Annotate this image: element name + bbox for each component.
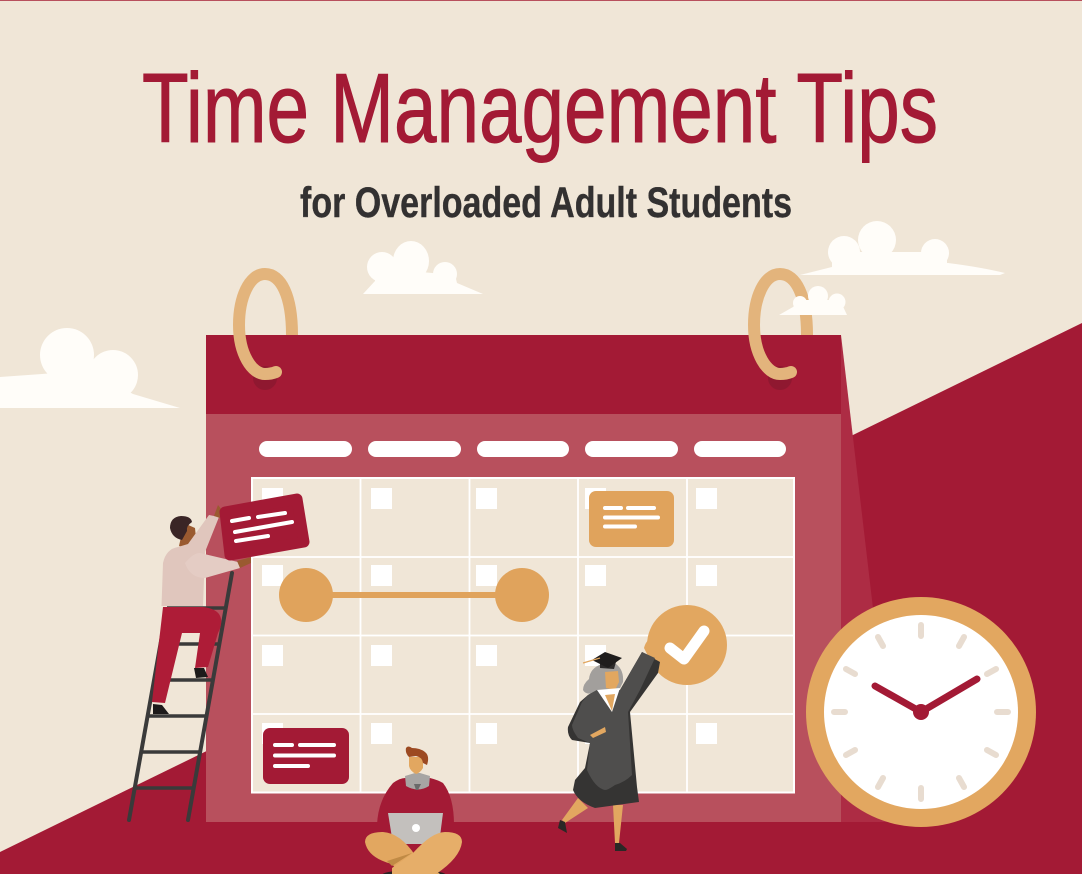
gown light overlay <box>572 652 655 790</box>
panel: calendar <box>206 335 898 822</box>
person: on ladder <box>129 499 304 820</box>
shoes <box>558 820 627 851</box>
person: graduate <box>558 652 660 851</box>
sweater <box>377 778 454 850</box>
collar <box>597 688 620 712</box>
face <box>605 671 619 690</box>
background: red diagonal ground <box>0 323 1082 874</box>
card: red note bottom left <box>263 728 349 784</box>
subtitle: for Overloaded Adult Students <box>300 179 792 227</box>
hands <box>214 505 251 568</box>
legs <box>365 832 462 874</box>
legs <box>562 798 623 843</box>
trousers <box>152 607 221 703</box>
cloud: small in front of ring <box>779 286 847 315</box>
shadow <box>382 870 446 874</box>
calendar grid <box>252 478 795 793</box>
collar <box>405 773 430 790</box>
check badge <box>644 605 727 685</box>
shirt <box>162 515 219 606</box>
card held <box>225 499 304 555</box>
timeline bar <box>279 568 549 622</box>
head <box>406 746 428 774</box>
laptop <box>388 813 443 844</box>
weekday pills <box>259 441 786 457</box>
ring: left <box>239 274 298 390</box>
clock <box>806 597 1036 827</box>
cloud: top centre <box>363 241 483 294</box>
gown silhouette <box>568 652 660 808</box>
clock ticks <box>834 625 1008 799</box>
hair <box>583 664 623 694</box>
cloud: left <box>0 328 180 408</box>
hair and face <box>170 516 196 549</box>
calendar body <box>206 414 841 822</box>
ring: right <box>754 274 813 390</box>
mortarboard cap <box>583 652 622 669</box>
calendar back side strip <box>841 335 898 822</box>
card: orange note <box>589 491 674 547</box>
calendar header <box>206 335 841 414</box>
forearm <box>590 727 606 738</box>
clock hands <box>875 679 977 720</box>
shoes <box>153 668 208 714</box>
cloud: top right <box>800 221 1005 275</box>
ladder <box>129 573 232 820</box>
person: seated with laptop <box>365 746 462 874</box>
